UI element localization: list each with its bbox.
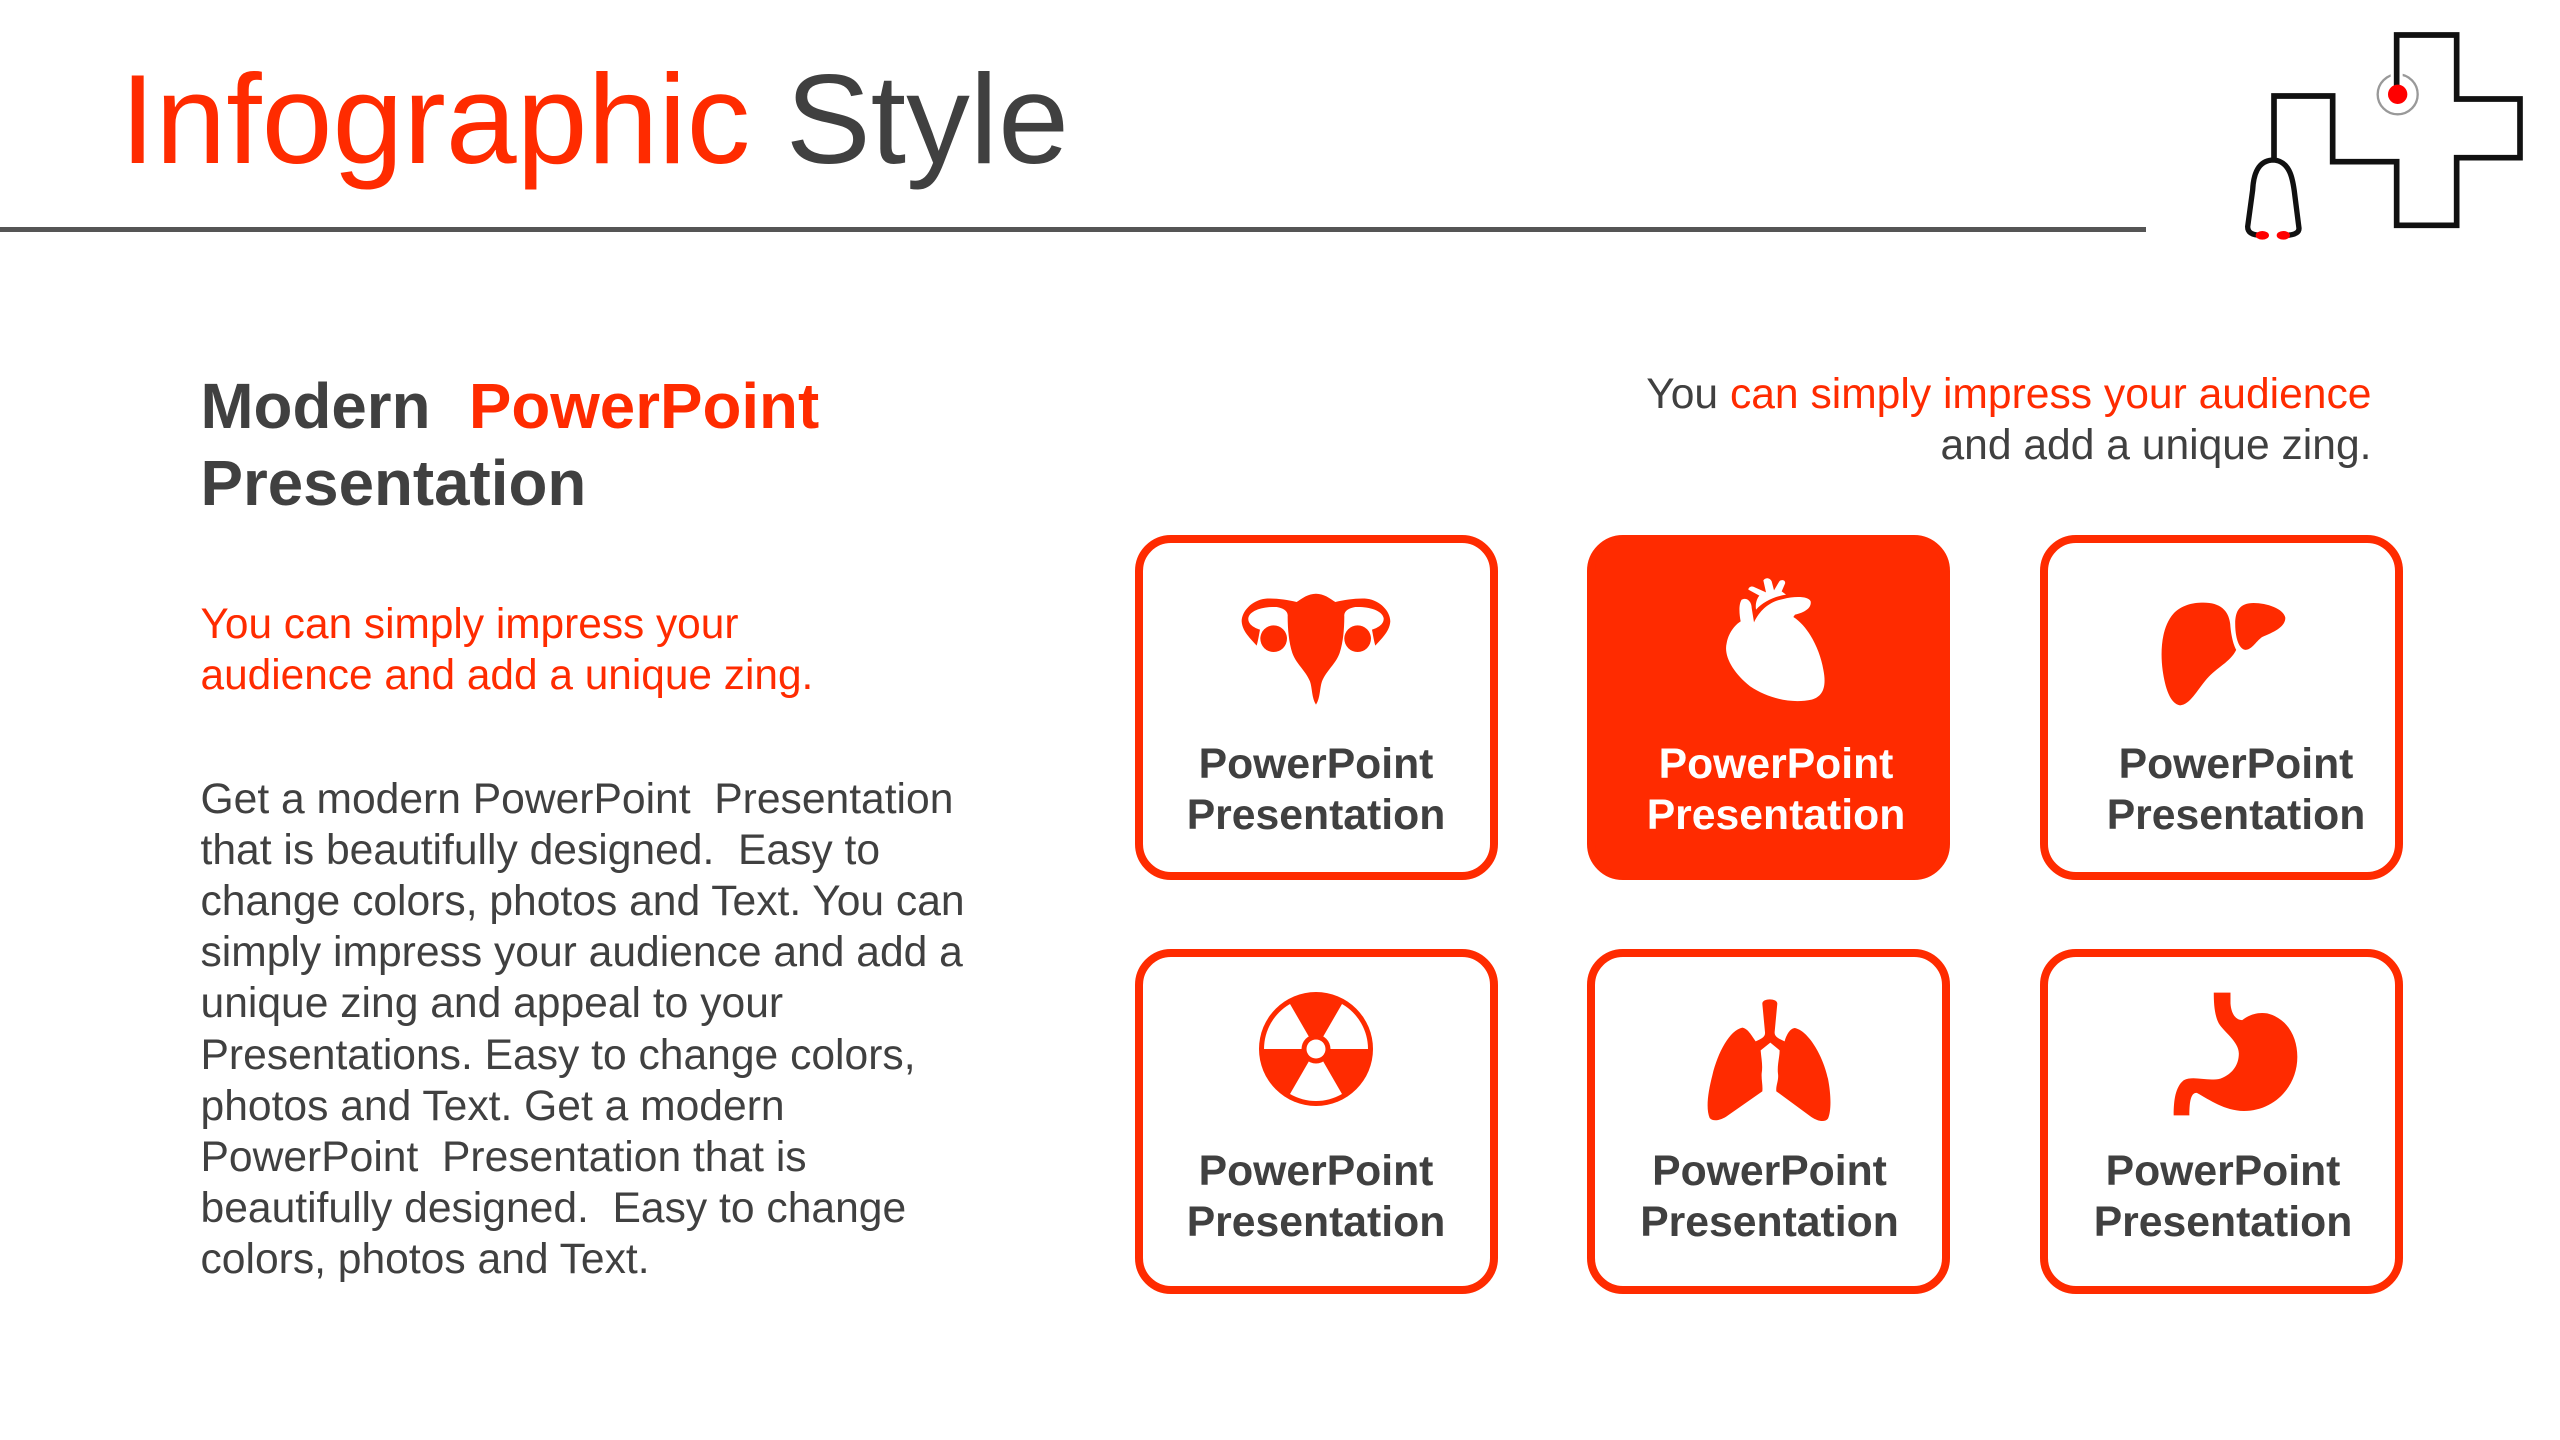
- heading: Modern PowerPoint Presentation: Modern PowerPoint Presentation: [200, 371, 819, 519]
- icon: lungs: [1708, 999, 1830, 1121]
- label: Presentation: [1647, 790, 1905, 838]
- card: heart (filled): [1587, 535, 1950, 880]
- title: Infographic Style: [120, 48, 1069, 190]
- red subheading text: You can simply impress your audience and add a unique zing.: [200, 600, 813, 698]
- label: [1647, 740, 1905, 838]
- header rule: [0, 226, 2146, 232]
- card: lungs: [1587, 949, 1950, 1294]
- icon: stomach: [2174, 992, 2298, 1116]
- label: Presentation: [2107, 790, 2365, 838]
- label: [1187, 740, 1445, 838]
- label: [1187, 1147, 1445, 1246]
- label: Presentation: [2094, 1198, 2352, 1246]
- card: stomach: [2040, 949, 2403, 1294]
- label: [2107, 740, 2365, 838]
- label: Presentation: [1640, 1198, 1899, 1246]
- logo: medical cross and stethoscope: [2245, 32, 2523, 240]
- label: PowerPoint: [2106, 1147, 2340, 1195]
- label: PowerPoint: [1199, 740, 1433, 788]
- label: PowerPoint: [2119, 740, 2353, 788]
- top right tagline: You can simply impress your audience and add a unique zing.: [1646, 370, 2372, 469]
- label: Presentation: [1187, 790, 1445, 838]
- body paragraph: Get a modern PowerPoint Presentation that is beautifully designed. Easy to change colors, photos and Text. You can simply impress your audience and add a unique zing and appeal to your Presentations. Easy to change colors, photos and Text. Get a modern PowerPoint Presentation that is beautifully designed. Easy to change colors, photos and Text.: [200, 774, 965, 1283]
- label: PowerPoint: [1199, 1147, 1433, 1195]
- label: [2094, 1147, 2352, 1246]
- card: uterus: [1135, 535, 1498, 880]
- icon: uterus: [1242, 594, 1390, 704]
- icon: heart: [1726, 578, 1825, 702]
- label: PowerPoint: [1659, 740, 1893, 788]
- label: Presentation: [1187, 1198, 1445, 1246]
- icon: radiation: [1259, 992, 1373, 1106]
- icon: liver: [2162, 602, 2286, 706]
- label: [1640, 1147, 1899, 1246]
- card: radiation: [1135, 949, 1498, 1294]
- label: PowerPoint: [1652, 1147, 1887, 1195]
- card: liver: [2040, 535, 2403, 880]
